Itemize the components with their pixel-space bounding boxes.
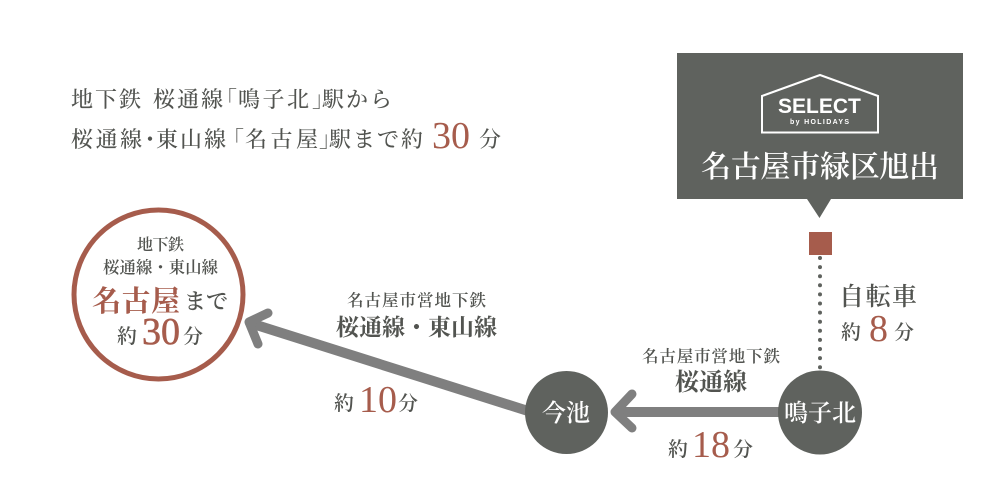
panel: property callout: [677, 53, 963, 218]
intro text: ・: [139, 123, 161, 154]
label: about 10 minutes: 10: [359, 379, 397, 421]
dotted route line: [818, 258, 822, 368]
intro text: 分: [479, 123, 501, 154]
icon: SELECT by HOLIDAYS house logo: [762, 75, 878, 132]
intro text: 桜通線: [153, 83, 223, 114]
arrow: Narukokita to Imaike: [615, 394, 780, 428]
intro text: 鳴子北: [238, 83, 309, 114]
label: bicycle 8 minutes: 約: [841, 316, 861, 345]
station: Imaike: 今池: [542, 393, 590, 428]
destination circle: Nagoya: 桜通線・東山線: [103, 254, 218, 278]
station: Imaike: [525, 371, 608, 454]
intro text: 「: [222, 123, 244, 154]
label: line name, Sakuradori and Higashiyama: 桜通線・東山線: [336, 309, 497, 342]
label: bicycle 8 minutes: 自転車: [839, 277, 917, 313]
destination circle: Nagoya: 約: [117, 320, 137, 349]
label: about 18 minutes: 分: [733, 433, 753, 462]
station: Narukokita: [778, 370, 862, 454]
arrow: Imaike to Nagoya: [249, 313, 530, 412]
icon: SELECT by HOLIDAYS house logo: by HOLIDAYS: [790, 119, 849, 126]
label: about 18 minutes: [668, 424, 753, 466]
destination circle: Nagoya: 地下鉄: [137, 232, 184, 255]
label: bicycle 8 minutes: 8: [869, 308, 888, 350]
label: line name, Sakuradori and Higashiyama: 名古屋市営地下鉄: [347, 287, 486, 311]
destination circle: Nagoya: [74, 210, 243, 379]
intro text: 駅まで約: [328, 123, 423, 154]
label: line name, Sakuradori: [642, 343, 780, 397]
label: about 10 minutes: 分: [398, 387, 418, 416]
label: line name, Sakuradori: 桜通線: [675, 362, 747, 397]
destination circle: Nagoya: 30: [142, 311, 180, 353]
label: about 18 minutes: 約: [668, 433, 688, 462]
intro text: 桜通線: [71, 123, 142, 154]
panel title: 名古屋市緑区旭出: [701, 142, 939, 186]
destination circle: Nagoya: 名古屋: [92, 279, 180, 320]
intro text: 30: [432, 115, 470, 157]
destination circle: Nagoya: まで: [184, 285, 228, 316]
label: about 10 minutes: 約: [334, 387, 354, 416]
intro text: 」: [312, 83, 334, 114]
station: Narukokita: 鳴子北: [784, 393, 856, 428]
intro text: 東山線: [156, 123, 226, 154]
label: bicycle 8 minutes: 分: [894, 316, 914, 345]
intro text: 」: [319, 123, 341, 154]
label: line name, Sakuradori: 名古屋市営地下鉄: [642, 343, 780, 367]
marker: property location: [809, 232, 832, 255]
intro text: [71, 83, 501, 157]
destination circle: Nagoya: 分: [183, 320, 203, 349]
intro text: 駅から: [321, 83, 392, 114]
intro text: 名古屋: [245, 123, 318, 154]
label: bicycle 8 minutes: [839, 277, 917, 350]
label: about 10 minutes: [334, 379, 418, 421]
intro text: 地下鉄: [71, 83, 141, 114]
icon: SELECT by HOLIDAYS house logo: SELECT: [778, 95, 861, 118]
label: about 18 minutes: 18: [692, 424, 730, 466]
intro text: 「: [215, 83, 237, 114]
label: line name, Sakuradori and Higashiyama: [336, 287, 497, 342]
